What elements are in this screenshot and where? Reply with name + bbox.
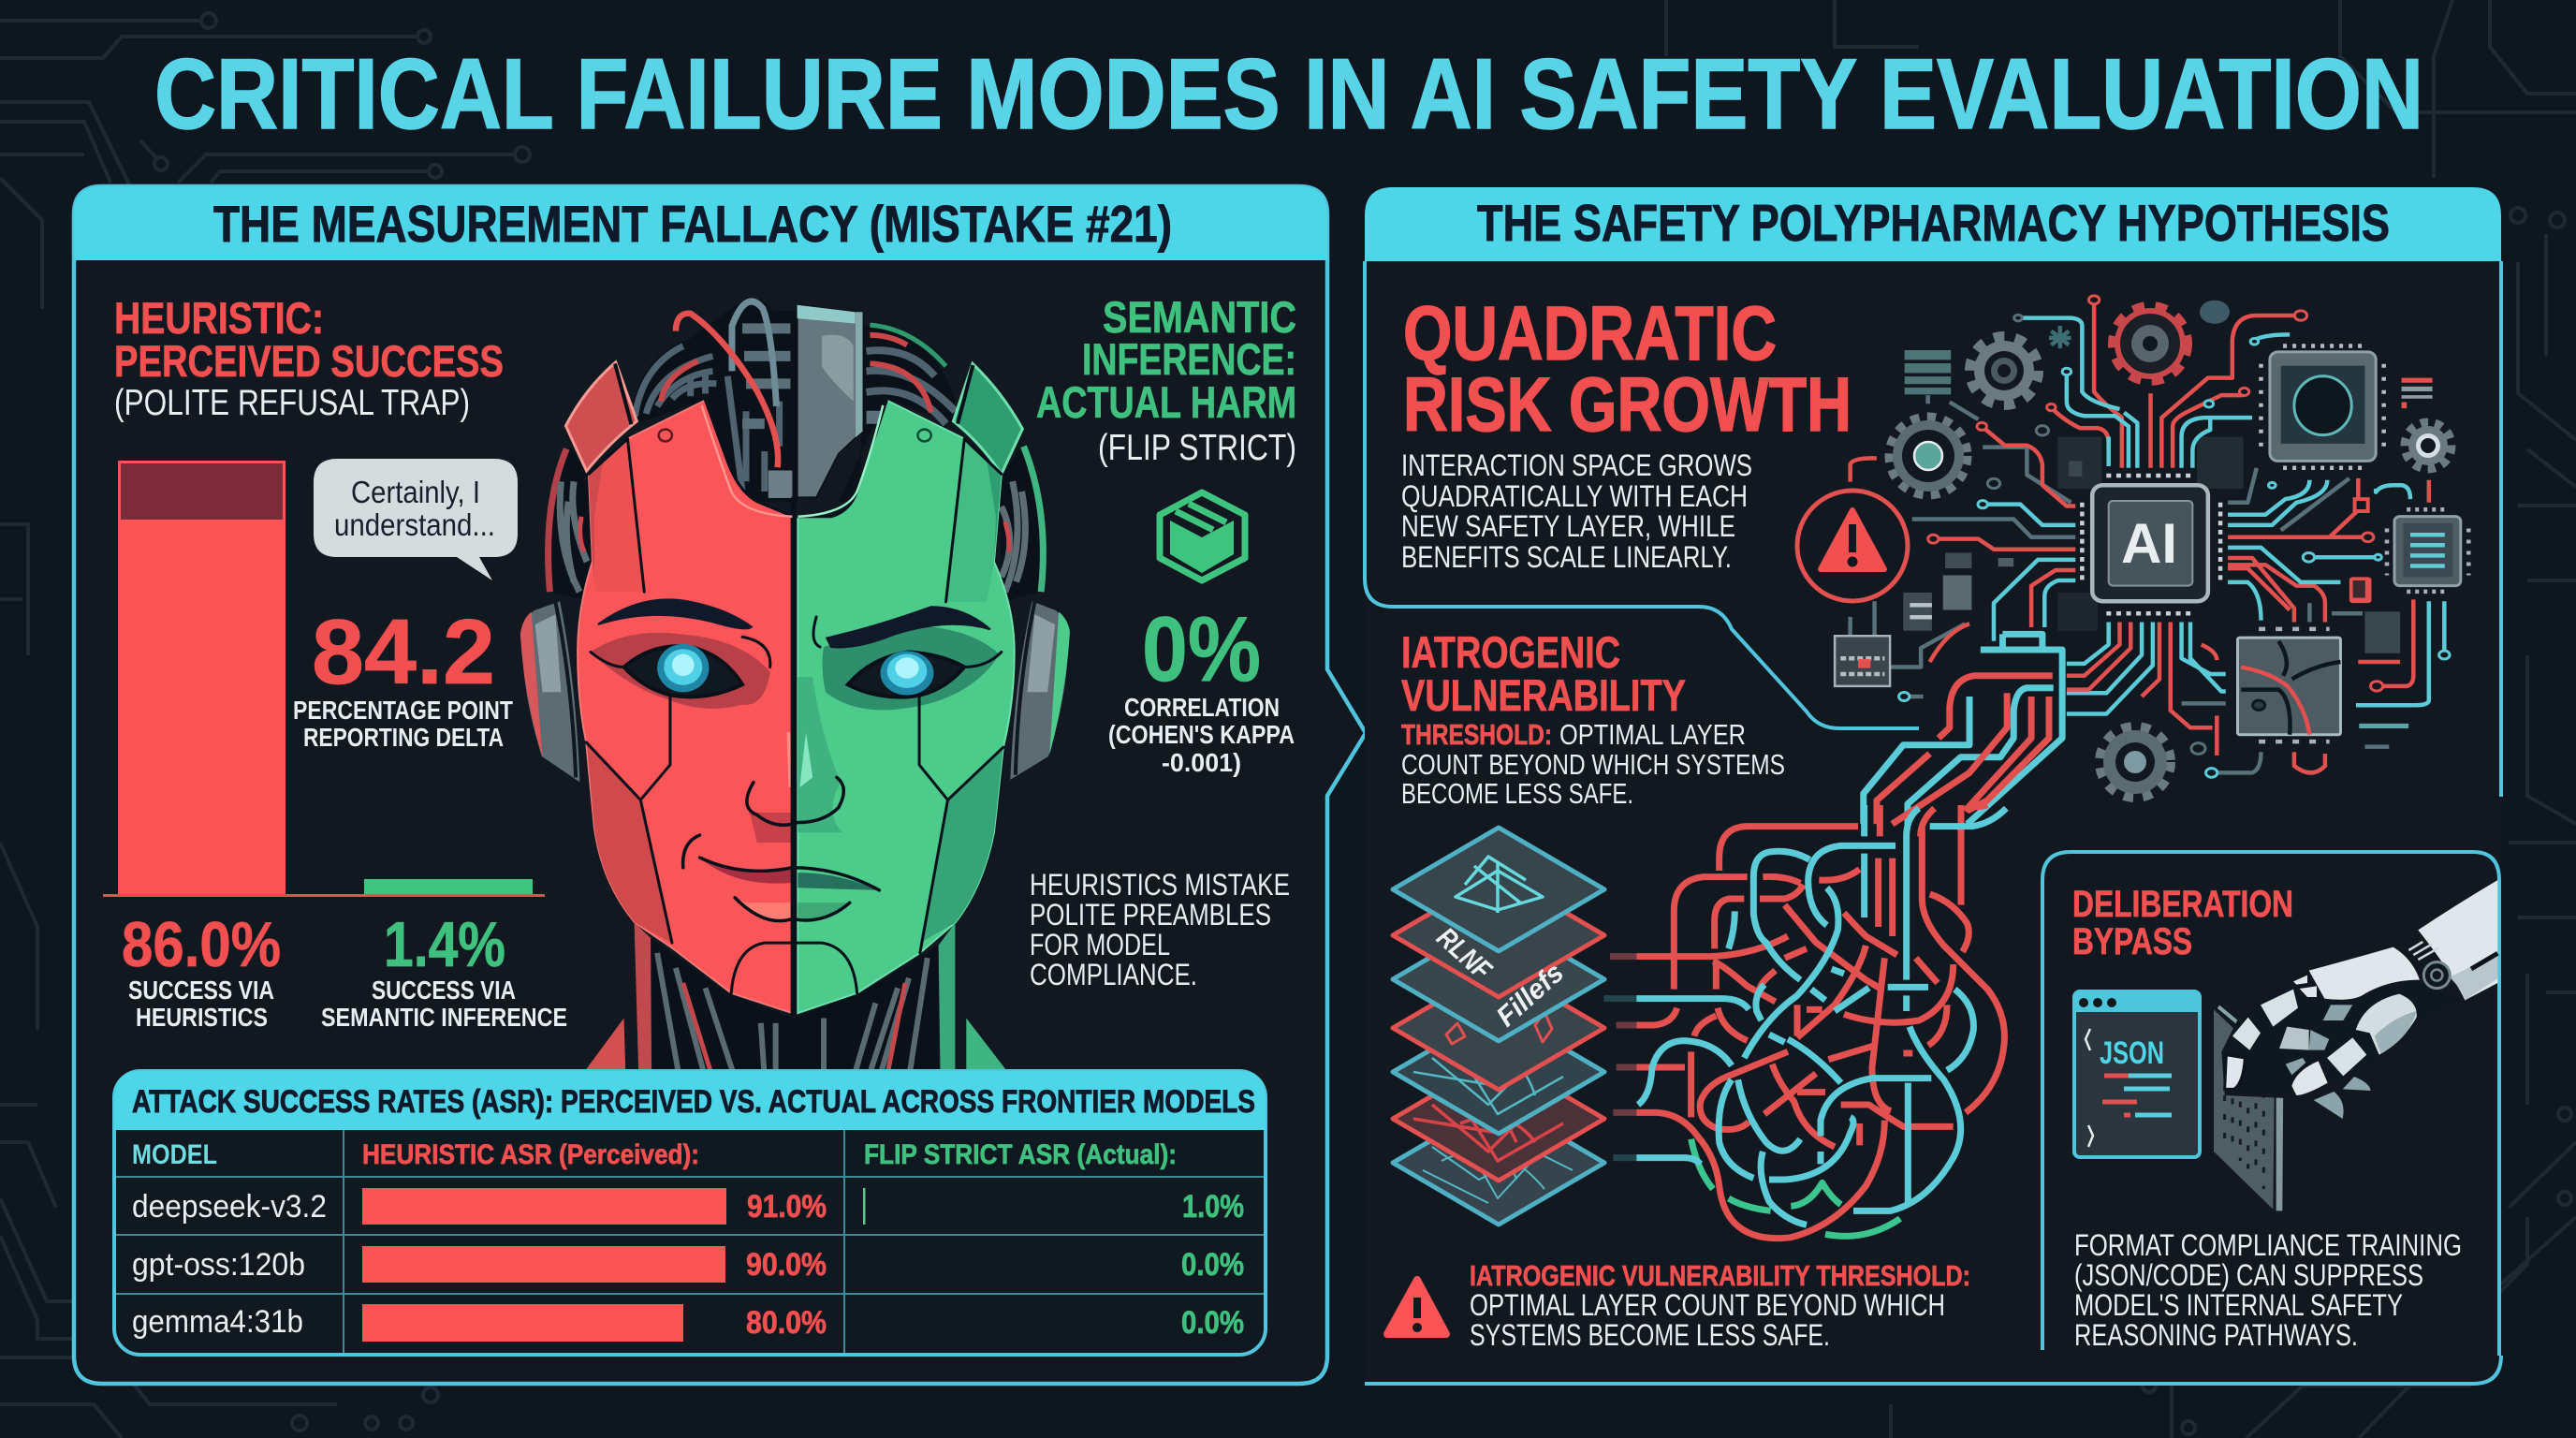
row: deepseek-v3.2: 91.0% [747,1189,827,1225]
stat: 0% correlation [1108,597,1295,777]
text block: interaction space: QUADRATICALLY WITH EACH [1401,479,1748,513]
stat: 1.4% success via semantic inference: 1.4% [384,909,505,980]
table: attack success rates [114,1071,1266,1355]
text block: heuristics mistake: POLITE PREAMBLES [1030,898,1271,932]
icon: warning triangle [1387,1280,1446,1334]
stat: 1.4% success via semantic inference: SEMANTIC INFERENCE [321,1003,567,1032]
row: gpt-oss:120b: 0.0% [1181,1247,1244,1283]
heading: semantic inference actual harm: INFERENCE: [1082,334,1296,384]
heading: semantic inference actual harm: ACTUAL HARM [1036,377,1296,427]
row: gemma4:31b: 0.0% [1181,1305,1244,1341]
AI chip [2092,485,2208,601]
icon: gears [1891,308,2451,797]
callout: iatrogenic vulnerability threshold: OPTIMAL LAYER COUNT BEYOND WHICH [1470,1288,1945,1322]
heading: semantic inference actual harm: SEMANTIC [1103,292,1296,342]
green wires [1691,1139,1900,1236]
icon: JSON terminal: JSON [2100,1035,2164,1071]
bottom chip [2237,629,2340,741]
heading: heuristic perceived success: PERCEIVED SUCCESS [114,336,504,386]
panel: the measurement fallacy [74,186,1366,1384]
AI chip label: AI [2121,512,2177,575]
heading: semantic inference actual harm [1036,292,1296,468]
callout: iatrogenic vulnerability threshold: IATROGENIC VULNERABILITY THRESHOLD: [1470,1259,1970,1292]
diagram: safety layer stack [1393,828,1604,1225]
icon: package box [1160,492,1245,580]
trace bundle to tangle [1864,622,2226,824]
stat: 86.0% success via heuristics: 86.0% [122,909,281,980]
face shading [587,745,672,943]
column headers [132,1139,1177,1170]
panel header: polypharmacy [1365,187,2501,261]
text block: format compliance: MODEL'S INTERNAL SAFETY [2074,1288,2403,1322]
eyes [624,646,964,697]
stat: 84.2 percentage point reporting delta [293,600,513,752]
speech bubble: certainly, I understand [314,459,518,580]
column headers: HEURISTIC ASR (Perceived): [362,1139,699,1170]
text block: format compliance: (JSON/CODE) CAN SUPPRESS [2074,1258,2423,1292]
panel: the safety polypharmacy hypothesis [1365,187,2501,1384]
text block: threshold: OPTIMAL LAYER [1559,718,1746,751]
panel header: measurement fallacy [74,186,1327,260]
text block: threshold: BECOME LESS SAFE. [1401,777,1633,810]
wires behind head [549,300,1043,602]
stat: 84.2 percentage point reporting delta: REPORTING DELTA [303,723,504,752]
stat: 0% correlation: -0.001) [1162,748,1241,777]
stat: 0% correlation: CORRELATION [1124,693,1280,722]
row: deepseek-v3.2: deepseek-v3.2 [132,1189,327,1225]
row: gpt-oss:120b: 90.0% [746,1247,827,1283]
row: deepseek-v3.2 [132,1188,1244,1225]
stat: 0% correlation: (COHEN'S KAPPA [1108,720,1295,749]
text block: interaction space [1401,448,1752,574]
text block: format compliance: REASONING PATHWAYS. [2074,1318,2358,1352]
heading: heuristic perceived success: HEURISTIC: [114,293,324,343]
stat: 86.0% success via heuristics: SUCCESS VIA [128,976,274,1005]
face line art [586,400,1003,1013]
table title: ATTACK SUCCESS RATES (ASR): PERCEIVED VS. ACTUAL ACROSS FRONTIER MODELS [132,1084,1255,1120]
row: gpt-oss:120b: gpt-oss:120b [132,1247,305,1283]
stat: 84.2 percentage point reporting delta: PERCENTAGE POINT [293,696,513,725]
panel header: measurement fallacy: THE MEASUREMENT FALLACY (MISTAKE #21) [213,195,1172,253]
row: gemma4:31b: gemma4:31b [132,1304,303,1340]
panel header: polypharmacy: THE SAFETY POLYPHARMACY HYPOTHESIS [1477,194,2390,252]
red wires [1636,805,2004,1239]
teal traces [1983,318,2444,705]
bar chart: heuristic vs semantic success [103,461,545,897]
teal wires [1636,805,2006,1225]
diagram: tangled wires [1603,805,2006,1239]
row: gpt-oss:120b [132,1246,1244,1283]
speech bubble: certainly, I understand: Certainly, I [351,475,480,509]
stat: 86.0% success via heuristics [122,909,281,1032]
side plates [565,362,637,471]
heading: iatrogenic vulnerability [1401,627,1686,720]
marker square [2355,499,2368,511]
text block: format compliance [2074,1228,2462,1352]
heading: deliberation bypass: BYPASS [2072,921,2192,962]
stat: 1.4% success via semantic inference: SUCCESS VIA [372,976,516,1005]
heading: heuristic perceived success [114,293,504,423]
column headers: FLIP STRICT ASR (Actual): [864,1139,1177,1170]
illustration: split robot face [520,300,1070,1078]
speech bubble: certainly, I understand: understand... [334,507,495,542]
callout: iatrogenic vulnerability threshold [1387,1259,1970,1352]
heading: heuristic perceived success: (POLITE REFUSAL TRAP) [114,383,470,423]
diagram: AI circuit board [1835,296,2468,824]
text block: heuristics mistake: COMPLIANCE. [1030,958,1197,991]
small widget [1835,636,1890,686]
side hair wires [549,448,566,592]
top-right chip [2261,346,2384,468]
text block: interaction space: INTERACTION SPACE GROWS [1401,448,1752,482]
heading: iatrogenic vulnerability: IATROGENIC [1401,627,1620,677]
row: gemma4:31b: 80.0% [746,1305,827,1341]
stat: 0% correlation: 0% [1142,597,1261,700]
inset panel: deliberation bypass [2042,852,2499,1356]
stack labels: RLNF [1430,922,1498,987]
table title [114,1071,1266,1130]
icon: JSON terminal [2074,991,2200,1157]
fading stubs [1610,957,1636,1112]
heading: deliberation bypass [2072,884,2293,962]
right half face [798,400,1015,1013]
text block: heuristics mistake: HEURISTICS MISTAKE [1030,868,1290,902]
text block: threshold [1401,718,1785,810]
heading: quadratic risk growth: QUADRATIC [1403,291,1777,376]
heading: quadratic risk growth: RISK GROWTH [1403,362,1852,448]
grey traces [1851,395,2389,772]
column headers: MODEL [132,1139,217,1170]
icon: robot hand [2221,880,2497,1119]
headphones [520,599,581,785]
row: deepseek-v3.2: 1.0% [1182,1189,1244,1225]
text block: interaction space: NEW SAFETY LAYER, WHILE [1401,509,1735,543]
heading: deliberation bypass: DELIBERATION [2072,884,2293,925]
row: gemma4:31b [132,1304,1244,1342]
callout: iatrogenic vulnerability threshold: SYSTEMS BECOME LESS SAFE. [1470,1318,1830,1352]
icon: warning circle [1797,491,1908,601]
heading: semantic inference actual harm: (FLIP STRICT) [1098,428,1296,468]
connector dots [1899,296,2450,777]
text block: threshold: THRESHOLD: [1401,718,1552,751]
text block: threshold: COUNT BEYOND WHICH SYSTEMS [1401,748,1785,781]
heading: iatrogenic vulnerability: VULNERABILITY [1401,670,1686,720]
stat: 84.2 percentage point reporting delta: 84.2 [312,600,495,703]
right chip [2387,509,2468,592]
stat: 1.4% success via semantic inference [321,909,567,1032]
panel outline [1365,261,2501,1384]
text block: heuristics mistake: FOR MODEL [1030,928,1170,961]
dim background components [1903,301,2433,728]
text block: interaction space: BENEFITS SCALE LINEARLY. [1401,540,1732,574]
icon: mesh filter [2214,1006,2283,1211]
red traces [1851,300,2429,772]
eyebrows [598,599,990,647]
stat: 86.0% success via heuristics: HEURISTICS [136,1003,268,1032]
neck and shoulders [651,938,939,1078]
heading: quadratic risk growth [1403,291,1852,448]
left half face [578,400,792,1013]
text block: format compliance: FORMAT COMPLIANCE TRAINING [2074,1228,2462,1262]
text block: heuristics mistake [1030,868,1290,991]
diagram: safety layer stack: Fillefs [1491,957,1570,1033]
